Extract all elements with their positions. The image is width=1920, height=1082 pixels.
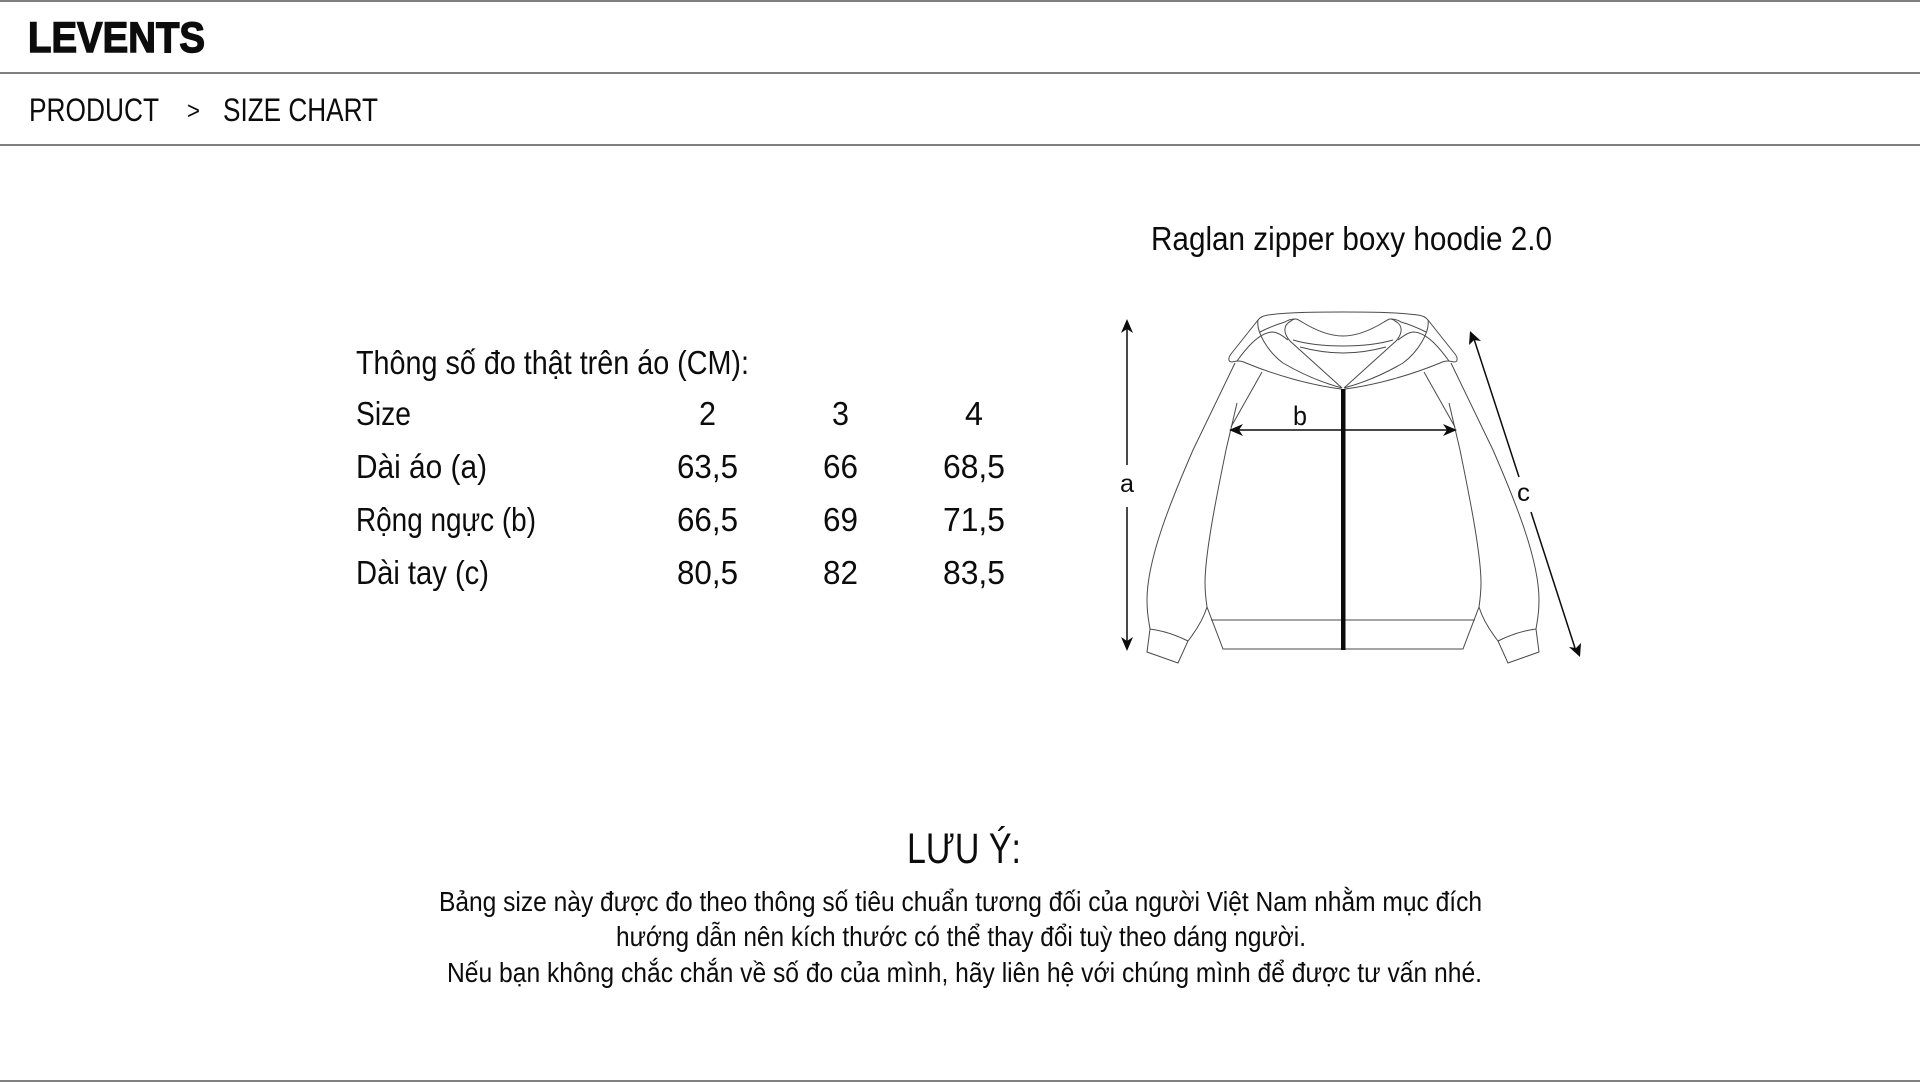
row: chest b: Rộng ngực (b) bbox=[356, 501, 536, 538]
brand logo: LEVENTS bbox=[28, 14, 205, 62]
note text: Nếu bạn không chắc chắn về số đo của mình, hãy liên hệ với chúng mình để được tư vấn nhé. bbox=[447, 957, 1482, 988]
row: size: 2 bbox=[699, 395, 716, 432]
hoodie left half bbox=[1147, 312, 1343, 663]
row: length a: 66 bbox=[823, 448, 858, 485]
breadcrumb bbox=[29, 92, 378, 128]
product title: Raglan zipper boxy hoodie 2.0 bbox=[1151, 220, 1552, 257]
breadcrumb: > bbox=[187, 97, 200, 125]
arrow c: sleeve length bbox=[1469, 331, 1581, 657]
row: chest b: 69 bbox=[823, 501, 858, 538]
breadcrumb: SIZE CHART bbox=[223, 92, 378, 128]
breadcrumb: PRODUCT bbox=[29, 92, 159, 128]
row: size bbox=[356, 395, 983, 432]
arrow a: body length bbox=[1120, 319, 1134, 651]
row: length a: 63,5 bbox=[677, 448, 738, 485]
size table bbox=[356, 344, 1005, 591]
row: sleeve c: 82 bbox=[823, 554, 858, 591]
row: chest b: 66,5 bbox=[677, 501, 738, 538]
row: sleeve c: 83,5 bbox=[943, 554, 1005, 591]
row: size: 3 bbox=[832, 395, 849, 432]
row: chest b: 71,5 bbox=[943, 501, 1005, 538]
row: sleeve c bbox=[356, 554, 1005, 591]
row: size: 4 bbox=[965, 395, 983, 432]
arrow c: sleeve length: c bbox=[1517, 479, 1530, 507]
zipper bbox=[1341, 389, 1346, 650]
row: chest b bbox=[356, 501, 1005, 538]
hoodie illustration bbox=[1147, 312, 1539, 663]
note text: Bảng size này được đo theo thông số tiêu chuẩn tương đối của người Việt Nam nhằm mục đích bbox=[439, 886, 1482, 917]
note heading: LƯU Ý: bbox=[907, 825, 1021, 873]
arrow a: body length: a bbox=[1120, 470, 1134, 498]
row: length a bbox=[356, 448, 1005, 485]
arrow b: chest width: b bbox=[1293, 401, 1307, 431]
note text: hướng dẫn nên kích thước có thể thay đổi tuỳ theo dáng người. bbox=[616, 921, 1306, 952]
hoodie right half bbox=[1343, 312, 1539, 663]
row: size: Size bbox=[356, 395, 411, 432]
row: length a: Dài áo (a) bbox=[356, 448, 487, 485]
row: sleeve c: Dài tay (c) bbox=[356, 554, 489, 591]
row: sleeve c: 80,5 bbox=[677, 554, 738, 591]
row: length a: 68,5 bbox=[943, 448, 1005, 485]
table heading: Thông số đo thật trên áo (CM): bbox=[356, 344, 749, 381]
arrow b: chest width bbox=[1229, 401, 1457, 436]
note text bbox=[439, 886, 1482, 988]
